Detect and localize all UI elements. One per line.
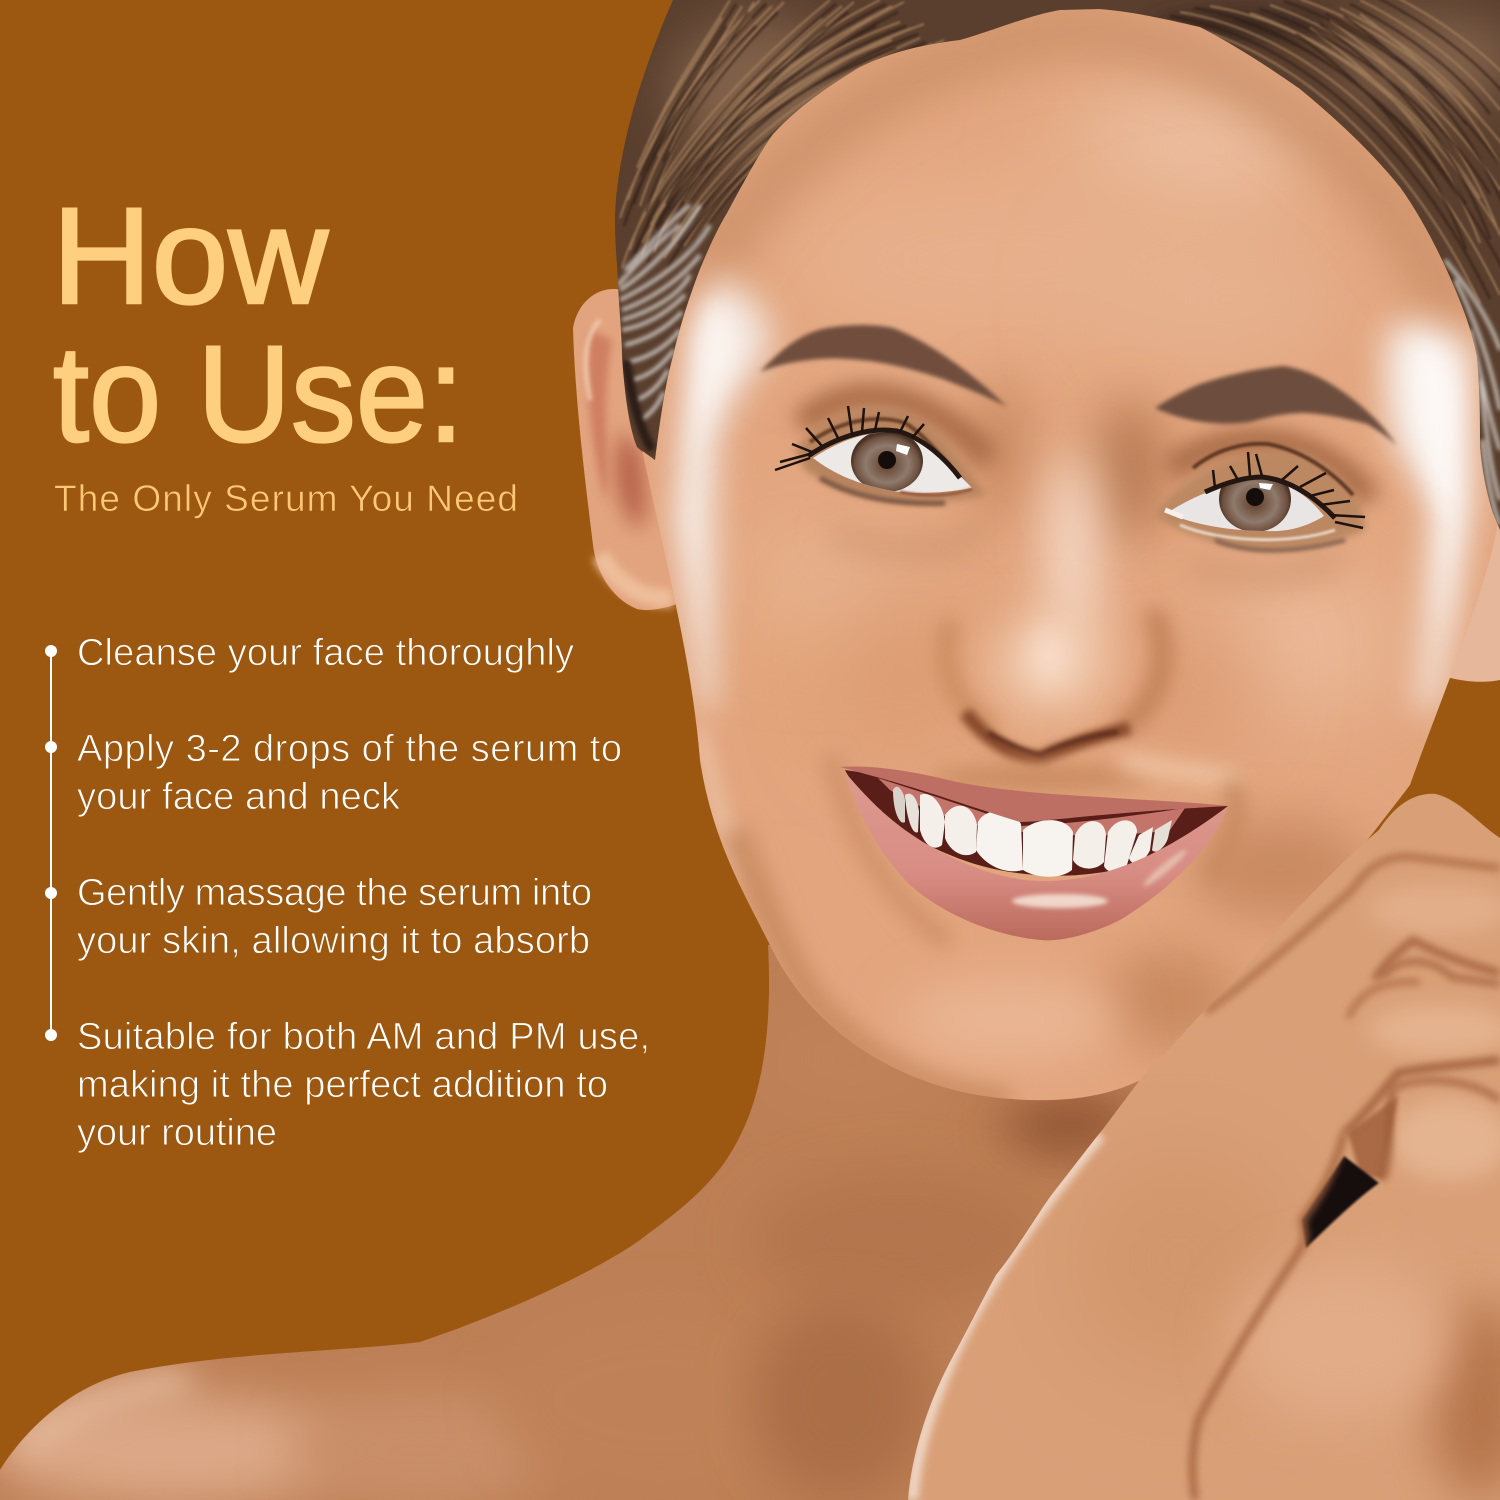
left eye (775, 406, 985, 503)
teeth (893, 787, 1172, 877)
step 3: your skin, allowing it to absorb (77, 920, 590, 962)
lower lip (845, 772, 1228, 940)
under-nose and lip shade (930, 764, 1150, 792)
right eyebrow (1155, 366, 1397, 446)
right eye (1155, 444, 1365, 550)
face (640, 0, 1500, 1120)
left ear (573, 289, 677, 610)
right ear (1443, 520, 1500, 682)
cheek shading (718, 632, 732, 679)
neck and shoulder (0, 944, 1140, 1500)
mouth cavity (845, 770, 1228, 876)
right grey strands (1445, 260, 1500, 525)
timeline (45, 645, 57, 1041)
brown between fingers (1348, 1096, 1398, 1179)
step 3: Gently massage the serum into (77, 872, 592, 914)
dark strands (624, 0, 1500, 309)
right temple highlights (1384, 323, 1475, 710)
step 2: your face and neck (77, 776, 401, 818)
step 2: Apply 3-2 drops of the serum to (77, 728, 622, 770)
finger creases (1206, 857, 1500, 1012)
step 3 (77, 872, 592, 962)
step 4: making it the perfect addition to (77, 1064, 608, 1106)
light strands (620, 0, 1500, 303)
gums (878, 778, 1185, 836)
upper lip (840, 767, 1228, 822)
jaw shadow (735, 830, 1010, 1100)
smile (840, 767, 1228, 940)
step 4 (77, 1016, 650, 1154)
left temple and cheek highlights (672, 275, 772, 720)
grey temple strands (618, 205, 710, 420)
title: How (52, 180, 329, 333)
step 4: your routine (77, 1112, 277, 1154)
left eyebrow (760, 325, 1007, 407)
steps list (77, 632, 650, 1154)
title (52, 180, 464, 471)
arm edge highlight (912, 1135, 1100, 1500)
forehead light (1070, 90, 1310, 210)
step 1: Cleanse your face thoroughly (77, 632, 574, 674)
hairline shadow (700, 30, 1460, 320)
nose bridge and tip (1050, 450, 1094, 670)
hair (600, 0, 1500, 540)
smile lines (830, 755, 950, 945)
title: to Use: (53, 318, 464, 471)
dark gap (1302, 1156, 1379, 1248)
step 4: Suitable for both AM and PM use, (77, 1016, 650, 1058)
step 2 (77, 728, 622, 818)
subtitle: The Only Serum You Need (54, 478, 518, 519)
eye socket shadows (970, 380, 1030, 520)
hand (880, 780, 1500, 1500)
